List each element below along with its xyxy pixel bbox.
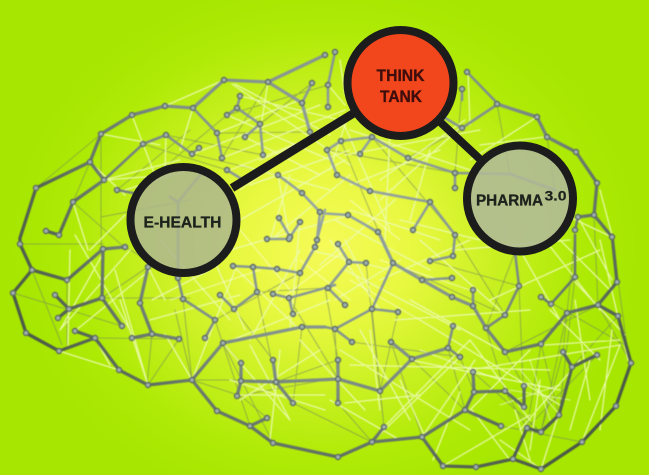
- hub: think tank: [348, 30, 454, 136]
- white light connections: [59, 60, 628, 469]
- label: superscript 3.0: 3.0: [544, 188, 567, 204]
- label: e-health: E-HEALTH: [144, 214, 222, 232]
- label: think: THINK: [376, 67, 425, 85]
- label: pharma: PHARMA: [476, 192, 543, 210]
- connector: think tank to e-health: [232, 113, 354, 188]
- grey inner branches: [104, 52, 578, 359]
- thin grey connections: [13, 82, 631, 443]
- connector: think tank to pharma: [438, 120, 483, 162]
- white light connections, bright core: [170, 130, 570, 420]
- label: tank: TANK: [380, 88, 422, 106]
- hub: e-health: [130, 167, 236, 273]
- hub: pharma 3.0: [467, 146, 573, 252]
